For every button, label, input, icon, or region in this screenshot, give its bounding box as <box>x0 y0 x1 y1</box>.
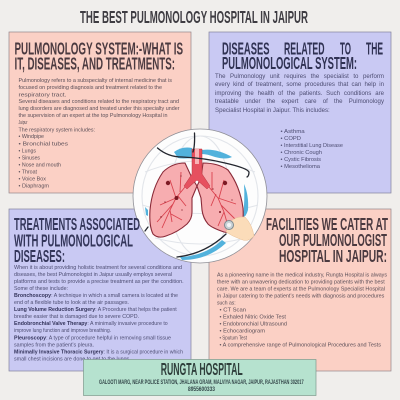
heading: pulmonology system: IT, DISEASES, AND TREATMENTS: <box>14 54 175 74</box>
text block: pulmonology description: focused on providing diagnosis and treatment related to the <box>18 85 162 91</box>
list: diseases: • Interstitial Lung Disease <box>280 143 343 149</box>
stethoscope tube <box>145 133 249 257</box>
text block: pulmonology description: Pulmonology refers to a subspecialty of internal medicine that is <box>18 78 172 84</box>
text block: diseases description: treatable under the expert care of the Pulmonology <box>215 98 384 105</box>
heading: diseases: THE <box>366 38 383 58</box>
text block: facilities description <box>217 272 387 306</box>
text block: pulmonology description: respiratory tract. <box>18 92 67 98</box>
list: diseases: • COPD <box>280 136 301 142</box>
hospital phone: 8955600333 <box>188 387 216 393</box>
text block: treatments description: end of a flexible tube to look at the air passages. <box>14 300 129 306</box>
text block: pulmonology description: The respiratory system includes: <box>18 127 95 133</box>
text block: diseases description: improving the health of the patients. Such conditions are <box>215 90 384 97</box>
text block: pulmonology description <box>18 78 180 133</box>
contact box: Rungta Hospital: RUNGTA HOSPITAL <box>161 359 243 379</box>
text block: treatments description: Bronchoscopy: A technique in which a small camera is located at the <box>14 293 178 299</box>
text block: treatments description: Pleuroscopy: A type of procedure helpful in removing small tissue <box>14 335 171 341</box>
text block: treatments description: Some of these include: <box>14 286 68 292</box>
heading: diseases: TO <box>340 38 351 58</box>
list: respiratory system parts: • Diaphragm <box>18 183 49 189</box>
heading: diseases: DISEASES <box>222 38 270 58</box>
panel: diseases <box>209 32 391 193</box>
list: diseases: • Cystic Fibrosis <box>280 157 321 163</box>
heading: pulmonology system: PULMONOLOGY SYSTEM:-WHAT IS <box>14 38 183 58</box>
panel: treatments <box>9 209 191 371</box>
panel: facilities <box>209 209 391 371</box>
heading: treatments <box>14 214 140 266</box>
text block: pulmonology description: the supervision of an expert at the top Pulmonology Hospital in <box>18 113 168 119</box>
list: facilities tests: • Sputum Test <box>220 336 247 342</box>
heading: treatments: DISEASES: <box>14 246 65 266</box>
text block: diseases description: Specialist Hospital in Jaipur. This includes: <box>215 107 330 114</box>
text block: diseases description <box>215 73 384 117</box>
text block: diseases description: every kind of treatment, some procedures that can help in <box>215 81 384 88</box>
text block: treatments description: Endobronchial Valve Therapy: A minimally invasive procedure to <box>14 321 168 327</box>
list: facilities tests <box>220 308 381 349</box>
text block: facilities description: such as: <box>217 300 236 306</box>
bronchial branches <box>157 172 238 228</box>
trachea and bronchi <box>184 149 210 189</box>
list: diseases <box>280 129 343 170</box>
right lung <box>197 163 243 233</box>
illustration: lungs with stethoscope <box>133 129 267 263</box>
text block: treatments description: Lung Volume Reduction Surgery: A Procedure that helps the patient <box>14 307 177 313</box>
text block: treatments description: Minimally Invasive Thoracic Surgery: It is a surgical procedure in which <box>14 349 183 355</box>
list: facilities tests: • A comprehensive range of Pulmonological Procedures and Tests <box>220 343 381 349</box>
list: diseases: • Mesothelioma <box>280 164 321 170</box>
text block: treatments description: When it is about providing holistic treatment for several conditions and <box>14 265 182 271</box>
heading: facilities <box>266 214 388 266</box>
list: respiratory system parts: • Sinuses <box>18 155 40 161</box>
list: respiratory system parts: • Bronchial tubes <box>18 141 68 147</box>
text block: treatments description <box>14 265 184 362</box>
list: respiratory system parts <box>18 134 68 189</box>
text block: facilities description: As a pioneering name in the medical industry, Rungta Hospital is always <box>217 272 387 278</box>
heading: pulmonology system <box>14 38 183 74</box>
heading: diseases: RELATED <box>284 38 324 58</box>
text block: pulmonology description: Jaipur <box>18 120 28 126</box>
panel: pulmonology system <box>9 32 191 193</box>
list: diseases: • Asthma <box>280 129 306 135</box>
list: diseases: • Chronic Cough <box>280 150 322 156</box>
text block: treatments description: small chest incisions are done to get to the lungs. <box>14 356 131 362</box>
list: respiratory system parts: • Lungs <box>18 148 36 154</box>
list: facilities tests: • CT Scan <box>220 308 246 314</box>
text block: facilities description: there with an unwavering dedication to providing patients with the best <box>217 280 385 286</box>
text block: treatments description: improve lung function and improve breathing. <box>14 328 111 334</box>
text block: treatments description: samples from the patient’s pleura. <box>14 342 94 348</box>
contact box: Rungta Hospital <box>84 359 316 396</box>
text block: treatments description: platforms and tests to provide a precise treatment as per the condition. <box>14 279 184 285</box>
lung spots <box>160 175 233 218</box>
list: respiratory system parts: • Windpipe <box>18 134 44 140</box>
list: respiratory system parts: • Throat <box>18 169 37 175</box>
left lung <box>150 163 197 237</box>
list: facilities tests: • Endobronchial Ultrasound <box>220 322 287 328</box>
text block: facilities description: care. We are a team of experts at the Pulmonology Specialist Hospital <box>217 287 385 293</box>
circle badge <box>133 129 267 263</box>
heading: treatments: TREATMENTS ASSOCIATED <box>14 214 140 234</box>
text block: treatments description: diseases, the best Pulmonologist in Jaipur usually employs several <box>14 272 172 278</box>
hand holding chest piece <box>224 217 254 240</box>
blue patches <box>145 148 248 260</box>
heading: diseases <box>222 38 383 73</box>
list: respiratory system parts: • Voice Box <box>18 176 46 182</box>
list: respiratory system parts: • Nose and mouth <box>18 162 61 168</box>
globe background <box>142 136 258 256</box>
text block: facilities description: in Jaipur catering to the patient’s needs with diagnosis and procedures <box>217 294 384 300</box>
heading: treatments: WITH PULMONOLOGICAL <box>14 230 133 250</box>
list: facilities tests: • Exhaled Nitric Oxide Test <box>220 314 286 320</box>
list: facilities tests: • Echocardiogram <box>220 329 265 335</box>
text block: treatments description: breathe easier that is damaged due to severe COPD. <box>14 314 139 320</box>
text block: pulmonology description: Several diseases and conditions related to the respiratory tract and <box>18 99 179 105</box>
text block: pulmonology description: lung disorders are diagnosed and treated under this specialty under <box>18 106 180 112</box>
text block: diseases description: The Pulmonology unit requires the specialist to perform <box>215 73 384 80</box>
